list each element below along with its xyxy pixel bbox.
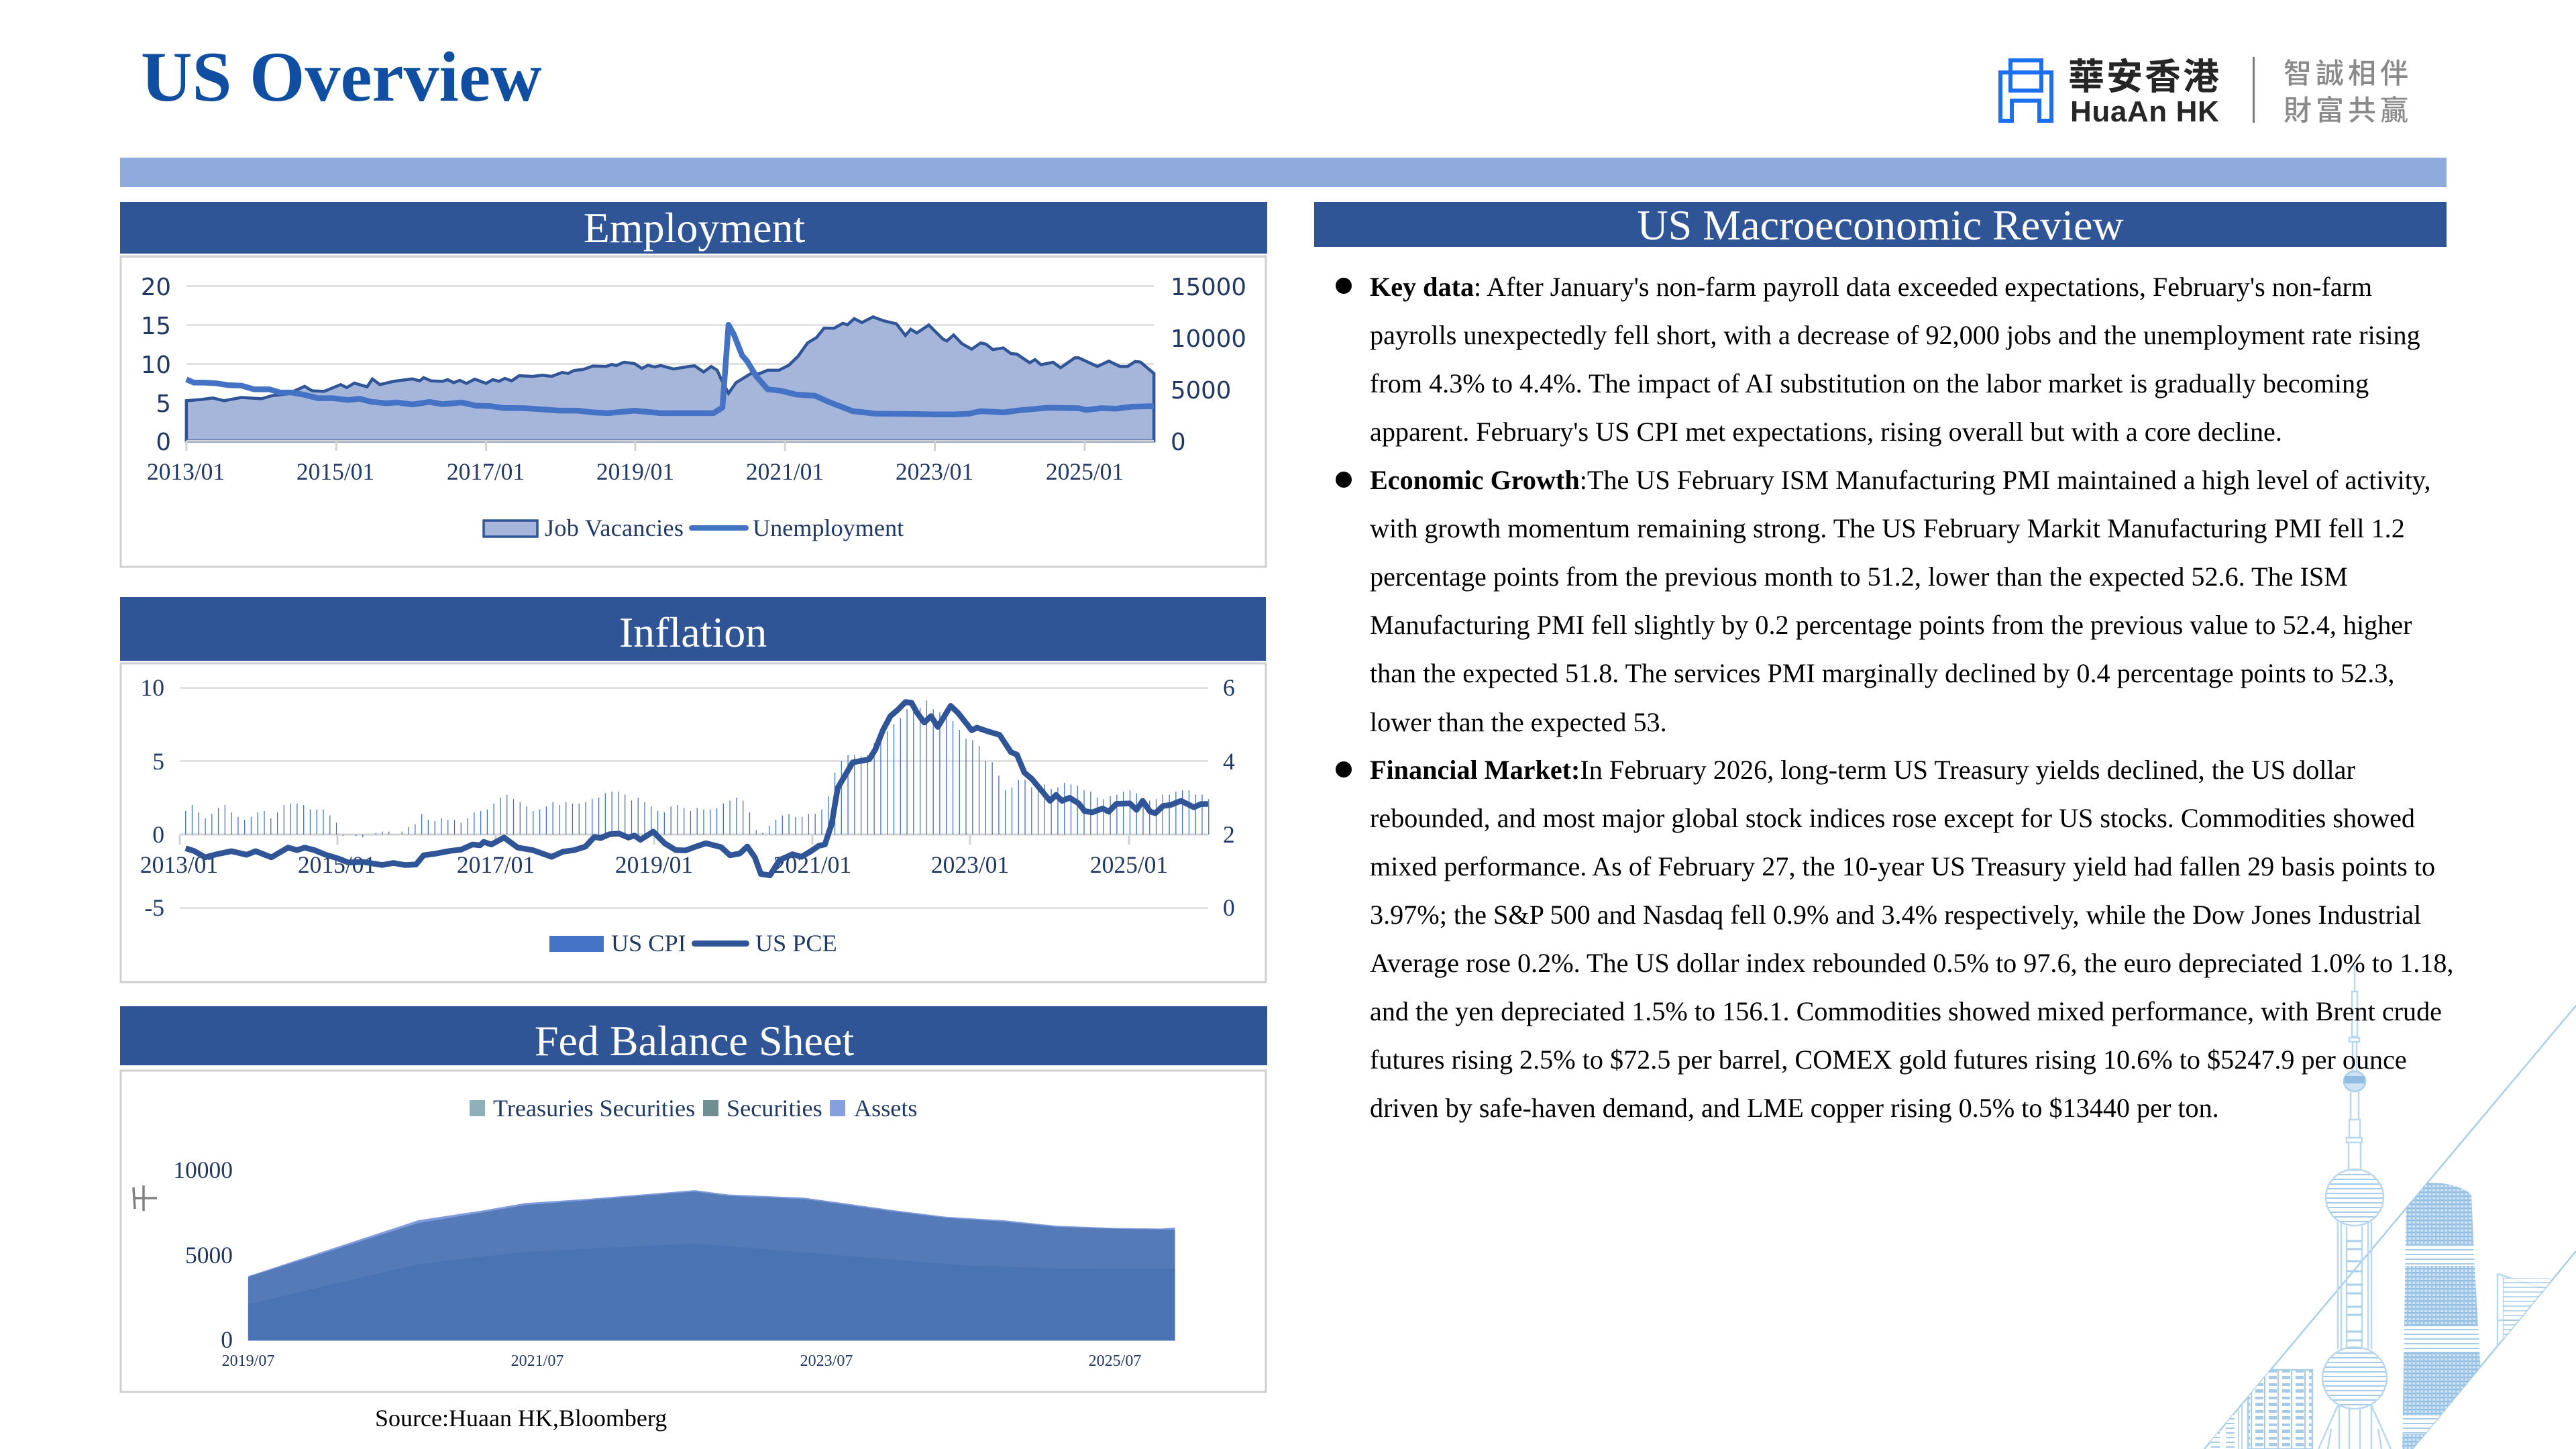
bullet marker [1336, 278, 1352, 294]
assets area [248, 1190, 1175, 1340]
logo slogan line 2: 財富共贏 [2284, 88, 2412, 129]
inflation x axis labels: 2017/01 [457, 851, 535, 878]
employment right axis labels: 0 [1171, 429, 1186, 456]
inflation left axis labels: 0 [152, 821, 164, 848]
inflation left axis labels [141, 674, 164, 921]
logo: Huaan HK [2000, 47, 2412, 129]
securities area [248, 1191, 1175, 1340]
employment left axis labels: 5 [156, 390, 171, 418]
review heading [1314, 201, 2447, 249]
key data text: Key data: After January's non-farm payroll data exceeded expectations, February's non-farm [1370, 272, 2372, 302]
pearl tower [2318, 965, 2391, 1449]
bullet block: economic growth [1336, 465, 2430, 737]
icon: logo mark [2000, 60, 2051, 121]
economic growth text: with growth momentum remaining strong. The US February Markit Manufacturing PMI fell 1.2 [1370, 513, 2405, 543]
inflation left axis labels: 10 [141, 674, 164, 701]
inflation legend [549, 930, 837, 957]
employment x axis labels: 2015/01 [297, 458, 374, 485]
inflation x axis labels: 2015/01 [298, 851, 376, 878]
fed legend: Securities [727, 1095, 822, 1122]
employment x axis labels [147, 458, 1124, 485]
fed x axis labels: 2019/07 [222, 1352, 274, 1370]
financial market text: mixed performance. As of February 27, the 10-year US Treasury yield had fallen 29 basis points to [1370, 851, 2435, 881]
small sphere [2344, 1071, 2365, 1091]
employment x axis labels: 2021/01 [746, 458, 824, 485]
column rungs [2347, 1241, 2362, 1340]
fed legend [470, 1095, 918, 1122]
left small buildings [2226, 1413, 2235, 1448]
fed legend: Assets [854, 1095, 918, 1122]
employment chart [186, 317, 1154, 451]
employment left axis labels: 20 [141, 274, 171, 301]
diagonal lines [2204, 1006, 2576, 1449]
US PCE line [186, 702, 1208, 875]
inflation right axis labels: 6 [1223, 674, 1235, 701]
fed frame [121, 1071, 1266, 1392]
rotated unit glyph [133, 1185, 157, 1211]
central tall building [2402, 1183, 2481, 1449]
inflation x axis labels: 2025/01 [1090, 851, 1168, 878]
logo name English: HuaAn HK [2070, 95, 2219, 128]
spire disk [2349, 1038, 2359, 1042]
financial market text: Financial Market:In February 2026, long-term US Treasury yields declined, the US dollar [1370, 755, 2355, 785]
inflation right axis labels [1223, 674, 1235, 921]
inflation legend: US CPI [611, 930, 686, 957]
skyline decoration [2204, 965, 2576, 1449]
economic growth text: Manufacturing PMI fell slightly by 0.2 percentage points from the previous value to 52.4, higher [1370, 610, 2412, 640]
inflation right axis labels: 2 [1223, 821, 1235, 848]
tower spire [2349, 965, 2361, 1170]
logo name Chinese: 華安香港 [2068, 47, 2221, 100]
fed x axis labels [222, 1352, 1141, 1370]
fed legend: Treasuries Securities [493, 1095, 695, 1122]
fed y axis labels [173, 1157, 233, 1353]
economic growth text: Economic Growth:The US February ISM Manufacturing PMI maintained a high level of activity, [1370, 465, 2430, 495]
economic growth text: lower than the expected 53. [1370, 707, 1667, 737]
employment left axis labels: 15 [141, 313, 171, 340]
fed x axis labels: 2023/07 [800, 1352, 853, 1370]
right angled building [2498, 1274, 2544, 1348]
logo divider [2253, 57, 2255, 123]
employment frame [121, 256, 1266, 567]
financial market text [1370, 755, 2453, 1123]
employment left axis labels: 0 [156, 429, 171, 456]
financial market text: Average rose 0.2%. The US dollar index rebounded 0.5% to 97.6, the euro depreciated 1.0% to 1.18, [1370, 948, 2453, 978]
left windowed building [2248, 1370, 2312, 1449]
bullet block: financial market [1336, 755, 2453, 1123]
financial market text: and the yen depreciated 1.5% to 156.1. Commodities showed mixed performance, with Brent crude [1370, 996, 2442, 1026]
employment x axis labels: 2025/01 [1046, 458, 1124, 485]
financial market text: 3.97%; the S&P 500 and Nasdaq fell 0.9% and 3.4% respectively, while the Dow Jones Industrial [1370, 900, 2421, 930]
financial market text: rebounded, and most major global stock indices rose except for US stocks. Commodities showed [1370, 803, 2415, 833]
employment x axis labels: 2013/01 [147, 458, 225, 485]
employment axis [186, 441, 1154, 451]
financial market text: futures rising 2.5% to $72.5 per barrel, COMEX gold futures rising 10.6% to $5247.9 per ounce [1370, 1044, 2407, 1075]
employment heading: Employment [584, 204, 806, 252]
economic growth text: than the expected 51.8. The services PMI marginally declined by 0.4 percentage points to 52.3, [1370, 658, 2394, 688]
treasuries area [248, 1244, 1175, 1340]
employment x axis labels: 2019/01 [596, 458, 674, 485]
fed y axis labels: 0 [221, 1326, 233, 1353]
inflation x axis labels: 2023/01 [931, 851, 1009, 878]
tower legs [2318, 1405, 2391, 1449]
employment heading [120, 202, 1267, 254]
employment left axis labels [141, 274, 171, 456]
tower collar [2347, 1138, 2362, 1142]
employment legend: Unemployment [753, 515, 904, 541]
fed y axis labels: 10000 [173, 1157, 233, 1183]
panel: fed balance sheet [120, 1006, 1267, 1392]
inflation left axis labels: 5 [152, 748, 164, 775]
source note: Source:Huaan HK,Bloomberg [375, 1405, 667, 1432]
inflation legend: US PCE [755, 930, 837, 957]
bullet marker [1336, 472, 1352, 488]
upper sphere [2326, 1169, 2383, 1226]
logo slogan line 1: 智誠相伴 [2284, 51, 2412, 92]
employment right axis labels [1171, 274, 1246, 456]
inflation heading [120, 597, 1266, 661]
top band [120, 158, 2447, 187]
panel: employment [120, 202, 1267, 567]
fed y axis labels: 5000 [185, 1242, 233, 1269]
inflation frame [121, 663, 1266, 982]
fed x axis labels: 2025/07 [1089, 1352, 1141, 1370]
inflation heading: Inflation [619, 608, 767, 656]
employment right axis labels: 10000 [1171, 325, 1246, 353]
key data text: payrolls unexpectedly fell short, with a decrease of 92,000 jobs and the unemployment rate rising [1370, 320, 2420, 350]
fed heading [120, 1006, 1267, 1065]
bullet block: key data [1336, 272, 2420, 447]
economic growth text [1370, 465, 2430, 737]
employment legend: Job Vacancies [545, 515, 684, 541]
inflation x axis labels: 2019/01 [615, 851, 693, 878]
unemployment line [186, 325, 1154, 415]
employment right axis labels: 15000 [1171, 274, 1246, 301]
US CPI bars [186, 700, 1209, 837]
inflation axis [180, 835, 1208, 845]
key data text [1370, 272, 2420, 447]
inflation left axis labels: -5 [144, 894, 164, 921]
panel: US macroeconomic review [1314, 201, 2453, 1123]
fed x axis labels: 2021/07 [511, 1352, 564, 1370]
inflation right axis labels: 0 [1223, 894, 1235, 921]
economic growth text: percentage points from the previous month to 51.2, lower than the expected 52.6. The ISM [1370, 561, 2348, 592]
review heading: US Macroeconomic Review [1637, 201, 2124, 249]
employment legend [484, 515, 904, 541]
inflation x axis labels: 2013/01 [140, 851, 218, 878]
key data text: from 4.3% to 4.4%. The impact of AI substitution on the labor market is gradually becoming [1370, 368, 2369, 398]
key data text: apparent. February's US CPI met expectations, rising overall but with a core decline. [1370, 417, 2282, 447]
clipped buildings [2211, 1174, 2551, 1449]
lower sphere [2322, 1347, 2387, 1409]
title: US Overview [141, 38, 542, 116]
employment right axis labels: 5000 [1171, 377, 1231, 405]
job vacancies area [186, 317, 1154, 441]
fed area chart [248, 1190, 1175, 1340]
tower columns [2338, 1222, 2371, 1349]
employment x axis labels: 2023/01 [896, 458, 973, 485]
inflation right axis labels: 4 [1223, 748, 1235, 775]
financial market text: driven by safe-haven demand, and LME copper rising 0.5% to $13440 per ton. [1370, 1093, 2219, 1123]
small sphere band [2345, 1076, 2365, 1083]
bullet marker [1336, 761, 1352, 777]
panel: inflation [120, 597, 1266, 982]
fed heading: Fed Balance Sheet [535, 1017, 854, 1065]
inflation x axis labels [140, 851, 1168, 878]
employment left axis labels: 10 [141, 352, 171, 379]
inflation x axis labels: 2021/01 [773, 851, 851, 878]
employment x axis labels: 2017/01 [447, 458, 525, 485]
